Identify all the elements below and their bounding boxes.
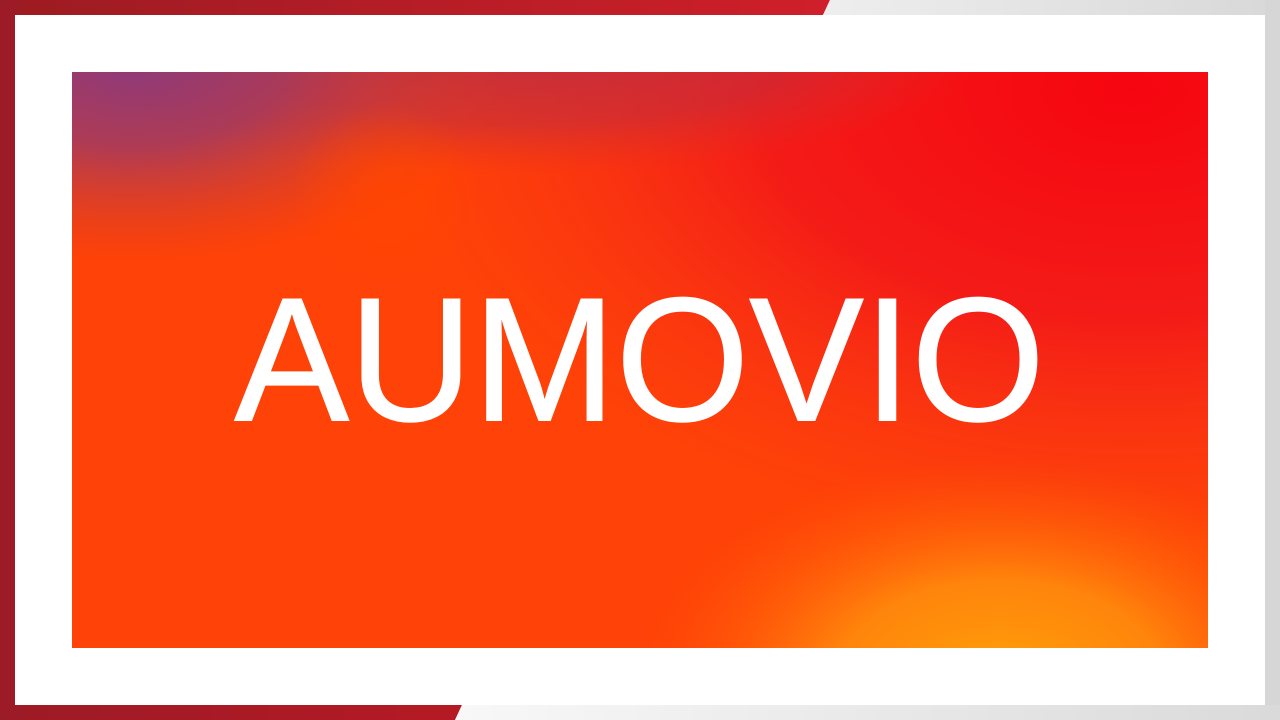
frame: top red bar <box>0 0 830 15</box>
frame: top gray bar <box>823 0 1280 15</box>
title: AUMOVIO wordmark: AUMOVIO <box>234 261 1045 458</box>
frame: left red bar <box>0 0 15 720</box>
frame: right gray bar <box>1265 0 1280 720</box>
frame: bottom gray bar <box>455 705 1280 720</box>
gradient panel <box>72 72 1208 648</box>
frame: bottom red bar <box>0 705 462 720</box>
